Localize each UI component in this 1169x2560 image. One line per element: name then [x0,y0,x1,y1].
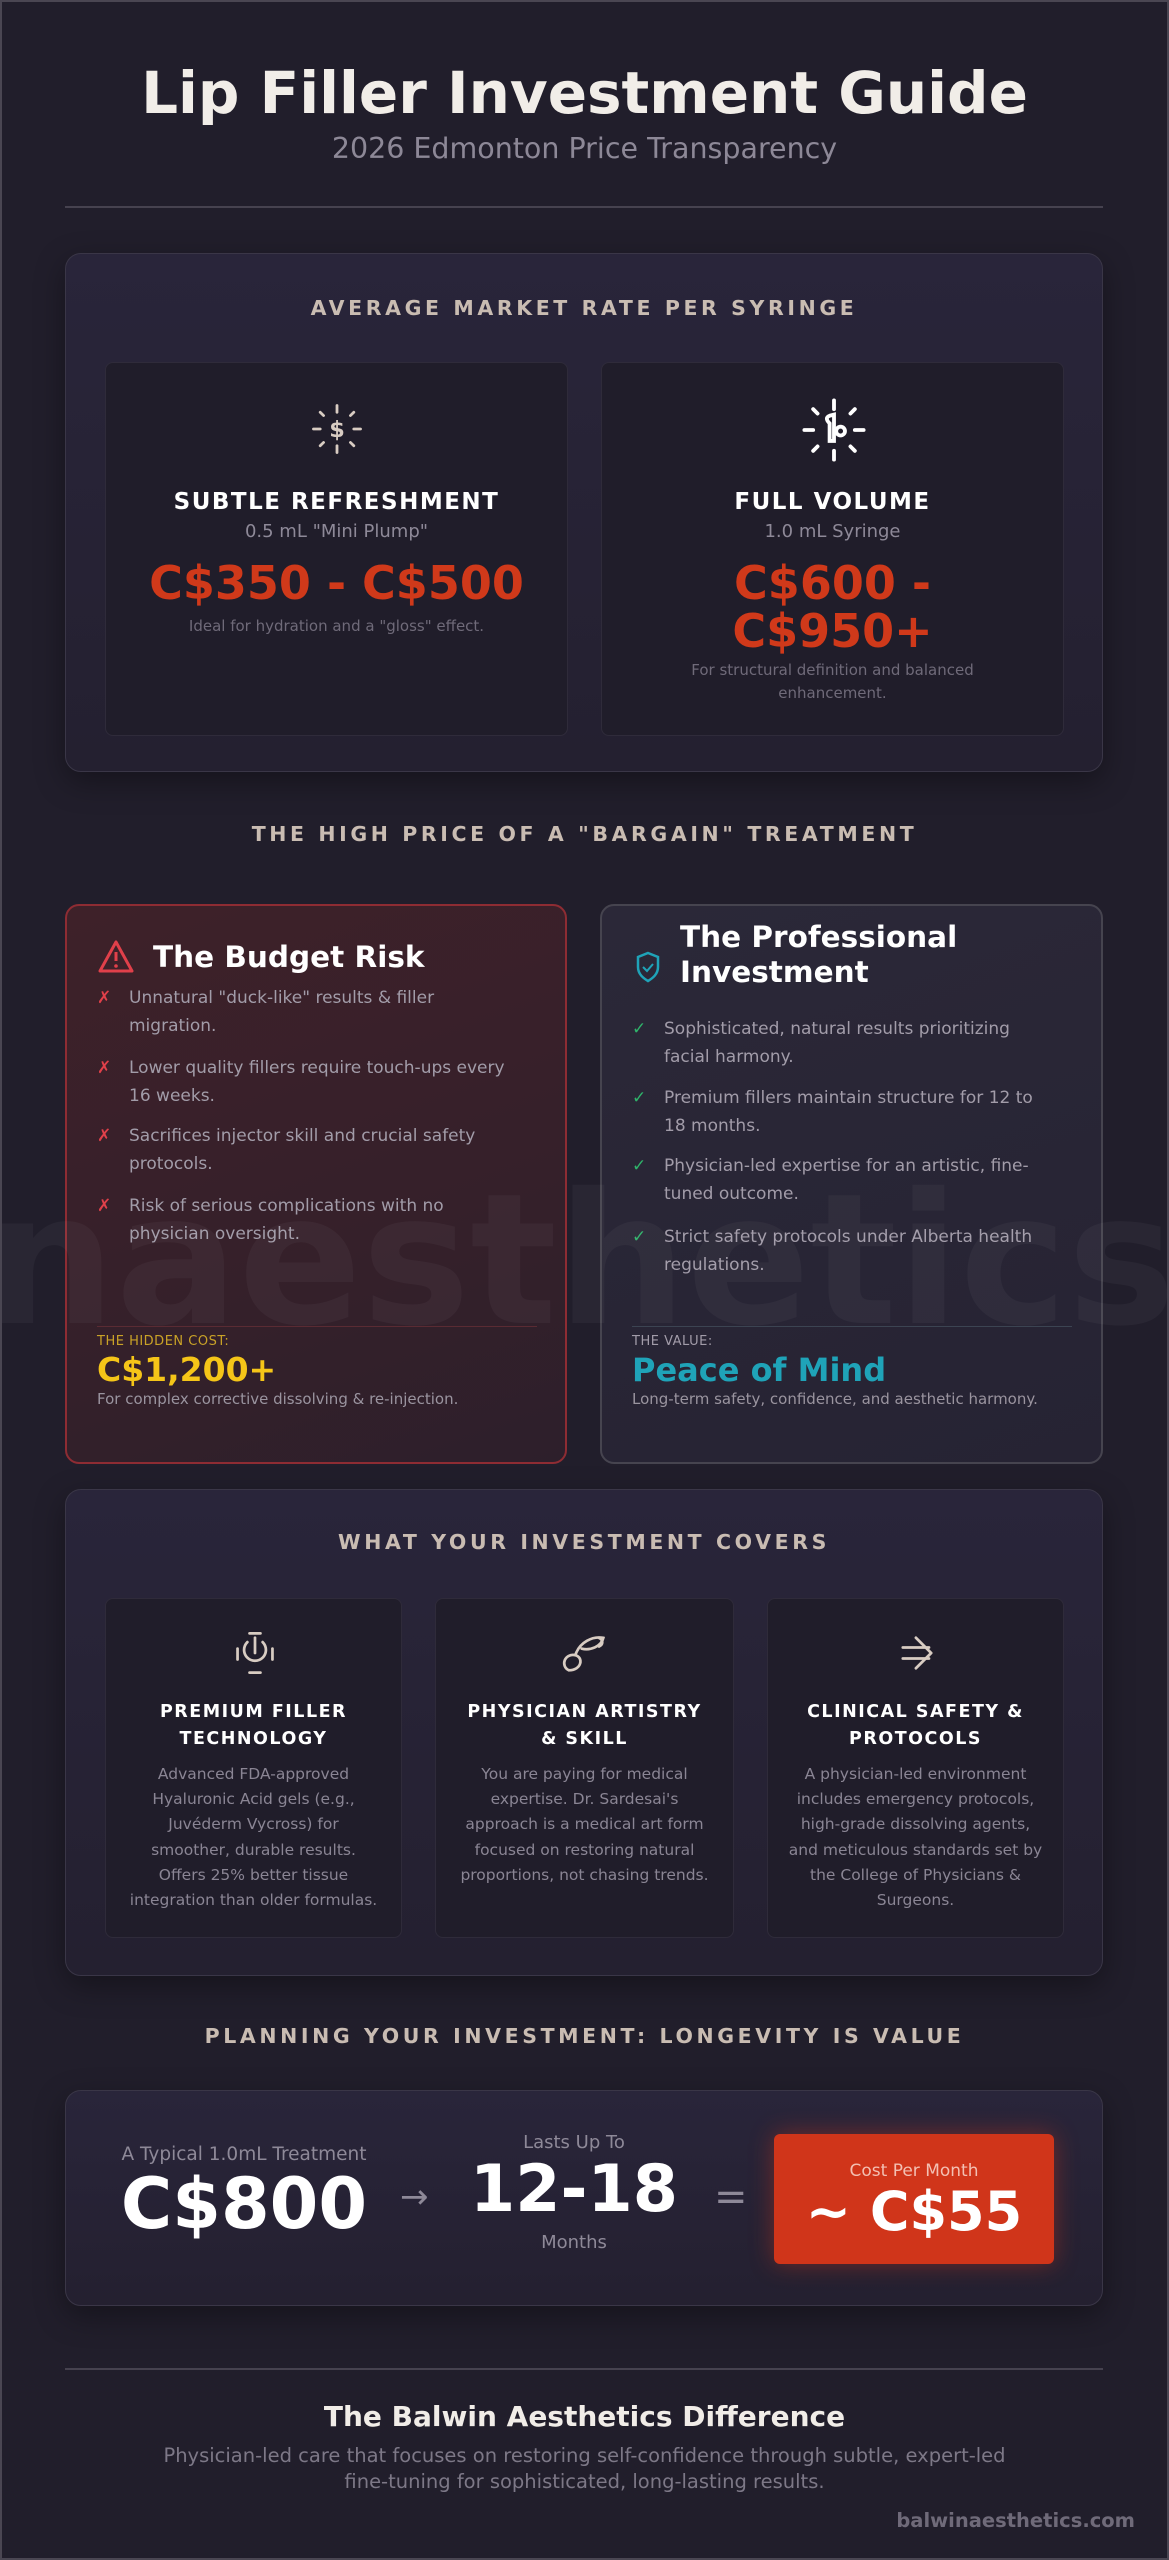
title: TECHNOLOGY [180,1729,327,1749]
title [160,1702,347,1749]
value: Long-term safety, confidence, and aesthetic harmony. [632,1390,1038,1408]
risk list: Lower quality fillers require touch-ups every 16 weeks. [129,1058,505,1106]
hidden cost: For complex corrective dissolving & re-injection. [97,1390,458,1408]
title: PROTOCOLS [849,1729,982,1749]
heading: bargain: THE HIGH PRICE OF A "BARGAIN" TREATMENT [252,822,917,846]
pro title [680,920,957,989]
card: subtle refreshment: 0.5 mL "Mini Plump" [245,521,428,542]
value: THE VALUE: [632,1334,713,1349]
title: & SKILL [541,1729,628,1749]
card: filler tech: Advanced FDA-approved Hyaluronic Acid gels (e.g., Juvéderm Vycross) for smoother, durable results. Offers 25% better tissue integration than older formulas. [130,1765,377,1909]
risk title: The Budget Risk [153,940,425,974]
risk list: ✗ [97,1058,111,1078]
title [807,1702,1024,1749]
risk list: ✗ [97,988,111,1008]
card title: SUBTLE REFRESHMENT [174,489,499,515]
card: artistry: You are paying for medical expertise. Dr. Sardesai's approach is a medical art form focused on restoring natural proportions, not chasing trends. [460,1765,709,1884]
hidden cost: THE HIDDEN COST: [97,1334,229,1349]
hidden cost: C$1,200+ [97,1350,276,1389]
title: PREMIUM FILLER [160,1702,347,1722]
heading: covers: WHAT YOUR INVESTMENT COVERS [338,1530,830,1554]
cost per month box: ~ C$55 [806,2180,1022,2243]
typical treatment: A Typical 1.0mL Treatment [121,2144,367,2165]
card: subtle refreshment [105,362,568,736]
risk list [97,988,505,1244]
pro title: The Professional [680,920,957,954]
price: C$600 - [734,556,931,610]
risk list: Sacrifices injector skill and crucial safety protocols. [129,1126,475,1174]
pro list: Physician-led expertise for an artistic, fine-tuned outcome. [664,1156,1029,1204]
panel: professional investment [600,904,1103,1464]
price: C$950+ [732,604,933,658]
pro list: Premium fillers maintain structure for 12 to 18 months. [664,1088,1033,1136]
pro list: ✓ [632,1227,646,1247]
domain: balwinaesthetics.com [896,2509,1135,2532]
card: full volume [601,362,1064,736]
icon: syringe sparkle [802,398,866,462]
icon: sparkle dollar: $ [329,417,345,443]
card: safety [767,1598,1064,1938]
hidden cost [96,1334,458,1408]
subtitle: 2026 Edmonton Price Transparency [332,132,837,165]
pro list: ✓ [632,1156,646,1176]
duration: Lasts Up To [523,2132,625,2153]
price: C$350 - C$500 [149,556,524,610]
title: Lip Filler Investment Guide [141,59,1028,127]
panel: cost per month [65,2090,1103,2306]
cost per month box [774,2134,1054,2264]
card: full volume: 1.0 mL Syringe [764,521,901,542]
panel: investment covers [65,1489,1103,1976]
value: Peace of Mind [632,1351,886,1389]
title: PHYSICIAN ARTISTRY [467,1702,702,1722]
pro title: Investment [680,955,869,989]
duration: 12-18 [470,2152,678,2227]
typical treatment: C$800 [121,2163,367,2245]
pro list [632,1019,1033,1275]
panel: budget risk [65,904,567,1464]
heading: market rate: AVERAGE MARKET RATE PER SYRINGE [311,296,857,320]
risk list: ✗ [97,1126,111,1146]
panel: average market rate [65,253,1103,772]
cost per month box: Cost Per Month [850,2161,978,2181]
card: safety: A physician-led environment includes emergency protocols, high-grade dissolving agents, and meticulous standards set by the College of Physicians & Surgeons. [789,1765,1042,1909]
pro list: Sophisticated, natural results prioritizing facial harmony. [664,1019,1010,1067]
risk list: Risk of serious complications with no physician oversight. [129,1196,444,1244]
risk list: ✗ [97,1196,111,1216]
duration [470,2132,678,2253]
card: filler tech [105,1598,402,1938]
card: subtle refreshment: Ideal for hydration and a "gloss" effect. [189,617,484,635]
card title: FULL VOLUME [734,489,931,515]
pro list: ✓ [632,1088,646,1108]
icon: sparkle dollar [312,404,362,454]
title [467,1702,702,1749]
pro list: Strict safety protocols under Alberta health regulations. [664,1227,1032,1275]
icon: shield [636,952,660,982]
title: CLINICAL SAFETY & [807,1702,1024,1722]
footer text: Physician-led care that focuses on restoring self-confidence through subtle, expert-led fine-tuning for sophisticated, long-lasting results. [163,2444,1006,2493]
footer title: The Balwin Aesthetics Difference [324,2400,845,2433]
heading: longevity: PLANNING YOUR INVESTMENT: LONGEVITY IS VALUE [205,2024,964,2048]
value [632,1334,1038,1408]
arrow: → [400,2177,428,2217]
watermark: naesthetics [0,1154,1169,1366]
pro list: ✓ [632,1019,646,1039]
icon: droplet [236,1632,274,1674]
icon: warning [98,940,134,972]
risk list: Unnatural "duck-like" results & filler migration. [129,988,434,1036]
price [732,556,933,658]
card: artistry [435,1598,734,1938]
icon: arrow [901,1636,933,1670]
card: full volume: For structural definition and balanced enhancement. [691,661,974,702]
equals: = [714,2174,748,2220]
duration: Months [541,2232,607,2253]
icon: brush [562,1636,605,1672]
